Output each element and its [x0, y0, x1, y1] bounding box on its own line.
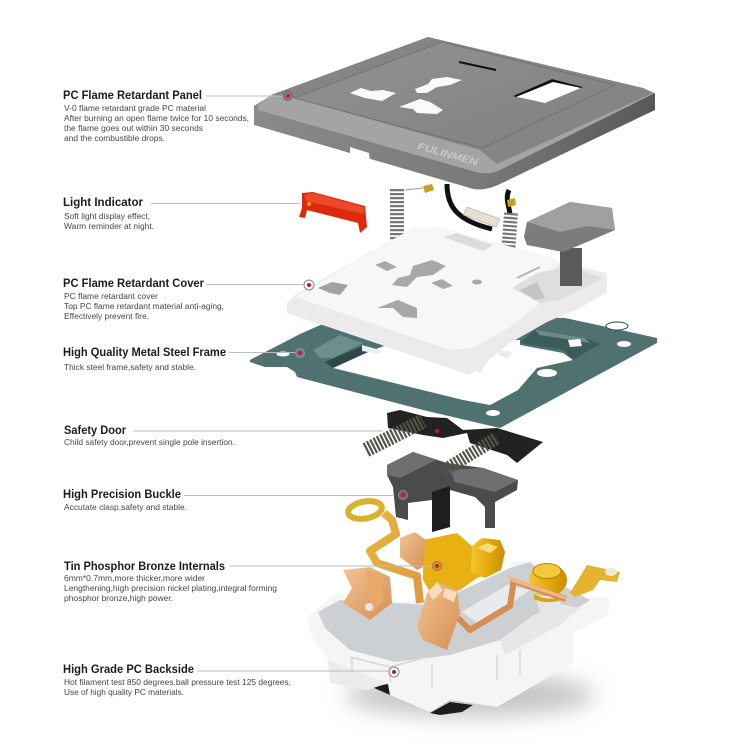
- cover holes: [318, 282, 348, 295]
- copper bar: [458, 579, 566, 630]
- panel face: [294, 42, 615, 148]
- callout: PC flame retardant cover: [63, 277, 314, 321]
- callout: PC flame retardant cover: Top PC flame retardant material anti-aging,: [64, 301, 224, 311]
- slot: [459, 62, 496, 70]
- callout: metal steel frame: [63, 346, 304, 372]
- buckle centre leg: [432, 486, 450, 532]
- callout: high precision buckle: High Precision Buckle: [63, 488, 182, 501]
- callout: safety door: Child safety door,prevent single pole insertion.: [64, 437, 235, 447]
- callout: PC flame retardant panel: After burning an open flame twice for 10 seconds,: [64, 113, 249, 123]
- part: high precision buckle: [387, 452, 518, 532]
- thin wire: [405, 188, 423, 190]
- panel bevel: [258, 37, 655, 173]
- brass crimp: [423, 184, 434, 193]
- panel top rim: [271, 37, 653, 164]
- buckle top face: [387, 452, 518, 492]
- callout: bronze internals: 6mm*0.7mm,more thicker,more wider: [64, 573, 205, 583]
- callout: PC backside: [63, 663, 399, 697]
- left spring: [390, 189, 404, 245]
- part: flame retardant cover: [287, 227, 607, 375]
- cover compartment: [512, 266, 603, 303]
- part: tin phosphor bronze internals: [343, 499, 620, 650]
- copper box: [400, 532, 426, 570]
- callout: bronze internals: [64, 560, 442, 603]
- frame ribs: [313, 335, 363, 358]
- centre hole: [415, 77, 462, 93]
- spring one: [366, 421, 423, 450]
- left contact: [343, 567, 392, 620]
- callout: high precision buckle: [63, 488, 408, 512]
- callout: PC backside: Hot filament test 850 degrees,ball pressure test 125 degrees,: [64, 677, 291, 687]
- callout: bronze internals: Tin Phosphor Bronze Internals: [64, 560, 225, 573]
- base rim details: [350, 650, 520, 688]
- part: safety door: [366, 410, 543, 471]
- callout: safety door: [64, 424, 442, 447]
- base lower shade: [328, 660, 388, 690]
- bronze ring and arm: [347, 499, 383, 521]
- part: switch rocker: [524, 202, 615, 286]
- frame holes: [276, 352, 290, 356]
- gold centre block: [423, 533, 503, 597]
- callout: metal steel frame: Thick steel frame,safety and stable.: [64, 362, 196, 372]
- rocker cap: [524, 202, 615, 252]
- rocker stem: [560, 248, 582, 286]
- callout: PC backside: Use of high quality PC materials.: [64, 687, 184, 697]
- callout: bronze internals: phosphor bronze,high power.: [64, 593, 173, 603]
- gold barrel: [471, 538, 505, 578]
- spring two: [443, 438, 497, 471]
- part: flame retardant panel: [254, 37, 655, 189]
- callout: bronze internals: Lengthening,high precision nickel plating,integral forming: [64, 583, 277, 593]
- glass fuse: [463, 207, 500, 227]
- callout: light indicator: [63, 196, 300, 231]
- base interior: [318, 562, 590, 662]
- panel side: [254, 93, 655, 189]
- cover top face: [295, 227, 560, 350]
- base inner wall: [462, 585, 530, 625]
- part: light indicator: [299, 192, 367, 233]
- right gold nut: [529, 564, 567, 596]
- base body: [307, 562, 610, 712]
- rectangular hole: [513, 79, 583, 103]
- callout: PC flame retardant cover: PC flame retardant cover: [64, 291, 158, 301]
- callout: light indicator: Soft light display effect,: [64, 211, 150, 221]
- black wire: [447, 184, 492, 229]
- cover body: [287, 227, 607, 375]
- backside shadow: [345, 673, 595, 717]
- callout: light indicator: Warm reminder at night.: [64, 221, 154, 231]
- callout: high precision buckle: Accutate clasp,safety and stable.: [64, 502, 187, 512]
- callout: PC backside: High Grade PC Backside: [63, 663, 195, 676]
- right spring: [507, 213, 511, 268]
- panel notch: [350, 147, 370, 162]
- dark feet: [372, 684, 473, 715]
- right gold tab: [570, 565, 620, 597]
- callout: PC flame retardant panel: [63, 89, 292, 143]
- callout: PC flame retardant panel: and the combustible drops.: [64, 133, 165, 143]
- callout: safety door: Safety Door: [64, 424, 126, 437]
- callout: light indicator: Light Indicator: [63, 196, 143, 209]
- callout: metal steel frame: High Quality Metal Steel Frame: [63, 346, 227, 359]
- centre contact: [417, 582, 460, 650]
- indicator top highlight: [304, 193, 364, 214]
- callout: PC flame retardant cover: Effectively prevent fire.: [64, 311, 149, 321]
- part: high grade PC backside: [307, 562, 610, 715]
- brand text: FULINMEN: [416, 141, 480, 169]
- callout: PC flame retardant cover: PC Flame Retardant Cover: [63, 277, 204, 290]
- callout: PC flame retardant panel: V-0 flame retardant grade PC material: [64, 103, 206, 113]
- callout: PC flame retardant panel: PC Flame Retardant Panel: [63, 89, 202, 102]
- cover tabs: [362, 345, 512, 373]
- callout: PC flame retardant panel: the flame goes out within 30 seconds: [64, 123, 203, 133]
- part: wires and springs: [397, 184, 516, 268]
- left hole: [350, 88, 396, 101]
- part: metal steel frame: [250, 312, 657, 428]
- lower hole: [399, 99, 443, 114]
